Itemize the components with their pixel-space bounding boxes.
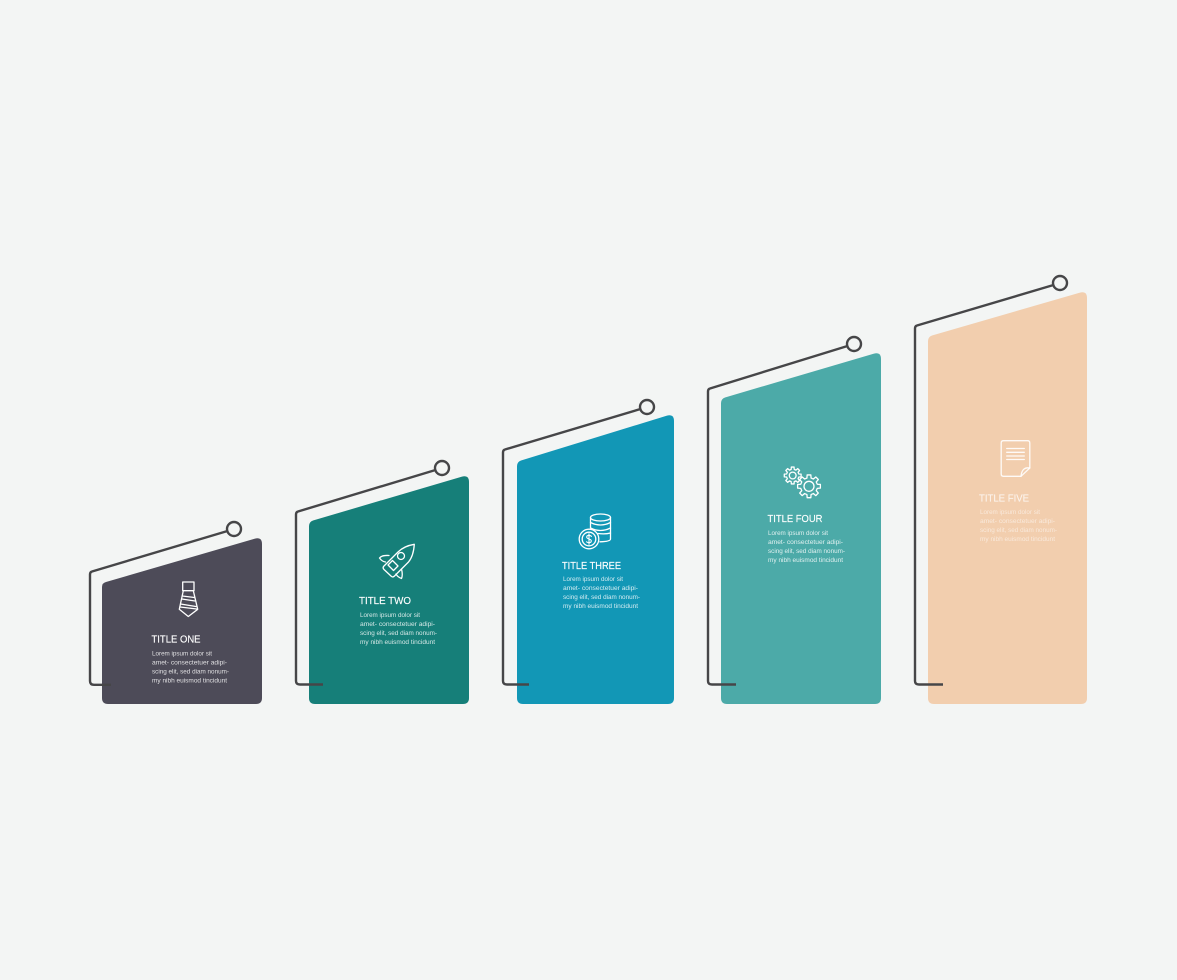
icon: necktie: [179, 582, 198, 616]
panel: title three: [503, 400, 674, 704]
heading: title one: TITLE ONE: [152, 634, 200, 646]
text block three: [563, 576, 640, 610]
card shape five: [928, 292, 1087, 704]
icon: rocket: [380, 544, 414, 578]
text block five: Lorem ipsum dolor sit: [980, 509, 1040, 516]
text block five: [980, 509, 1057, 543]
connector line five: [915, 276, 1067, 684]
text block four: my nibh euismod tincidunt: [768, 557, 843, 564]
connector line three: [503, 400, 654, 684]
panel: title five: [915, 276, 1087, 704]
connector line two: [296, 461, 449, 684]
text block one: my nibh euismod tincidunt: [152, 678, 227, 684]
connector line four: [708, 337, 861, 684]
text block two: amet- consectetuer adipi-: [360, 621, 435, 628]
icon: document: [1001, 441, 1030, 476]
panel: title two: [296, 461, 469, 704]
heading: title four: TITLE FOUR: [768, 513, 823, 525]
text block four: scing elit, sed diam nonum-: [768, 548, 845, 555]
text block one: Lorem ipsum dolor sit: [152, 650, 212, 658]
heading: title two: TITLE TWO: [359, 595, 411, 607]
icon: gears: [784, 467, 820, 498]
card shape two: [309, 476, 469, 704]
card shape three: [517, 415, 674, 704]
text block three: scing elit, sed diam nonum-: [563, 594, 640, 601]
panel: title four: [708, 337, 881, 704]
text block three: amet- consectetuer adipi-: [563, 585, 638, 592]
text block one: [152, 650, 229, 684]
text block four: Lorem ipsum dolor sit: [768, 530, 828, 537]
text block two: scing elit, sed diam nonum-: [360, 630, 437, 637]
text block five: scing elit, sed diam nonum-: [980, 527, 1057, 534]
text block four: [768, 530, 845, 564]
card shape one: [102, 538, 262, 704]
text block five: my nibh euismod tincidunt: [980, 536, 1055, 543]
text block one: scing elit, sed diam nonum-: [152, 668, 229, 676]
heading: title five: TITLE FIVE: [979, 492, 1029, 504]
connector line one: [90, 522, 241, 685]
text block two: my nibh euismod tincidunt: [360, 639, 435, 646]
text block one: amet- consectetuer adipi-: [152, 660, 227, 666]
text block four: amet- consectetuer adipi-: [768, 539, 843, 546]
card shape four: [721, 353, 881, 704]
text block three: Lorem ipsum dolor sit: [563, 576, 623, 583]
panel: title one: [90, 522, 262, 704]
icon: coin stack: [579, 514, 610, 549]
text block two: [360, 612, 437, 646]
text block three: my nibh euismod tincidunt: [563, 603, 638, 610]
text block five: amet- consectetuer adipi-: [980, 518, 1055, 525]
text block two: Lorem ipsum dolor sit: [360, 612, 420, 619]
heading: title three: TITLE THREE: [562, 560, 621, 572]
